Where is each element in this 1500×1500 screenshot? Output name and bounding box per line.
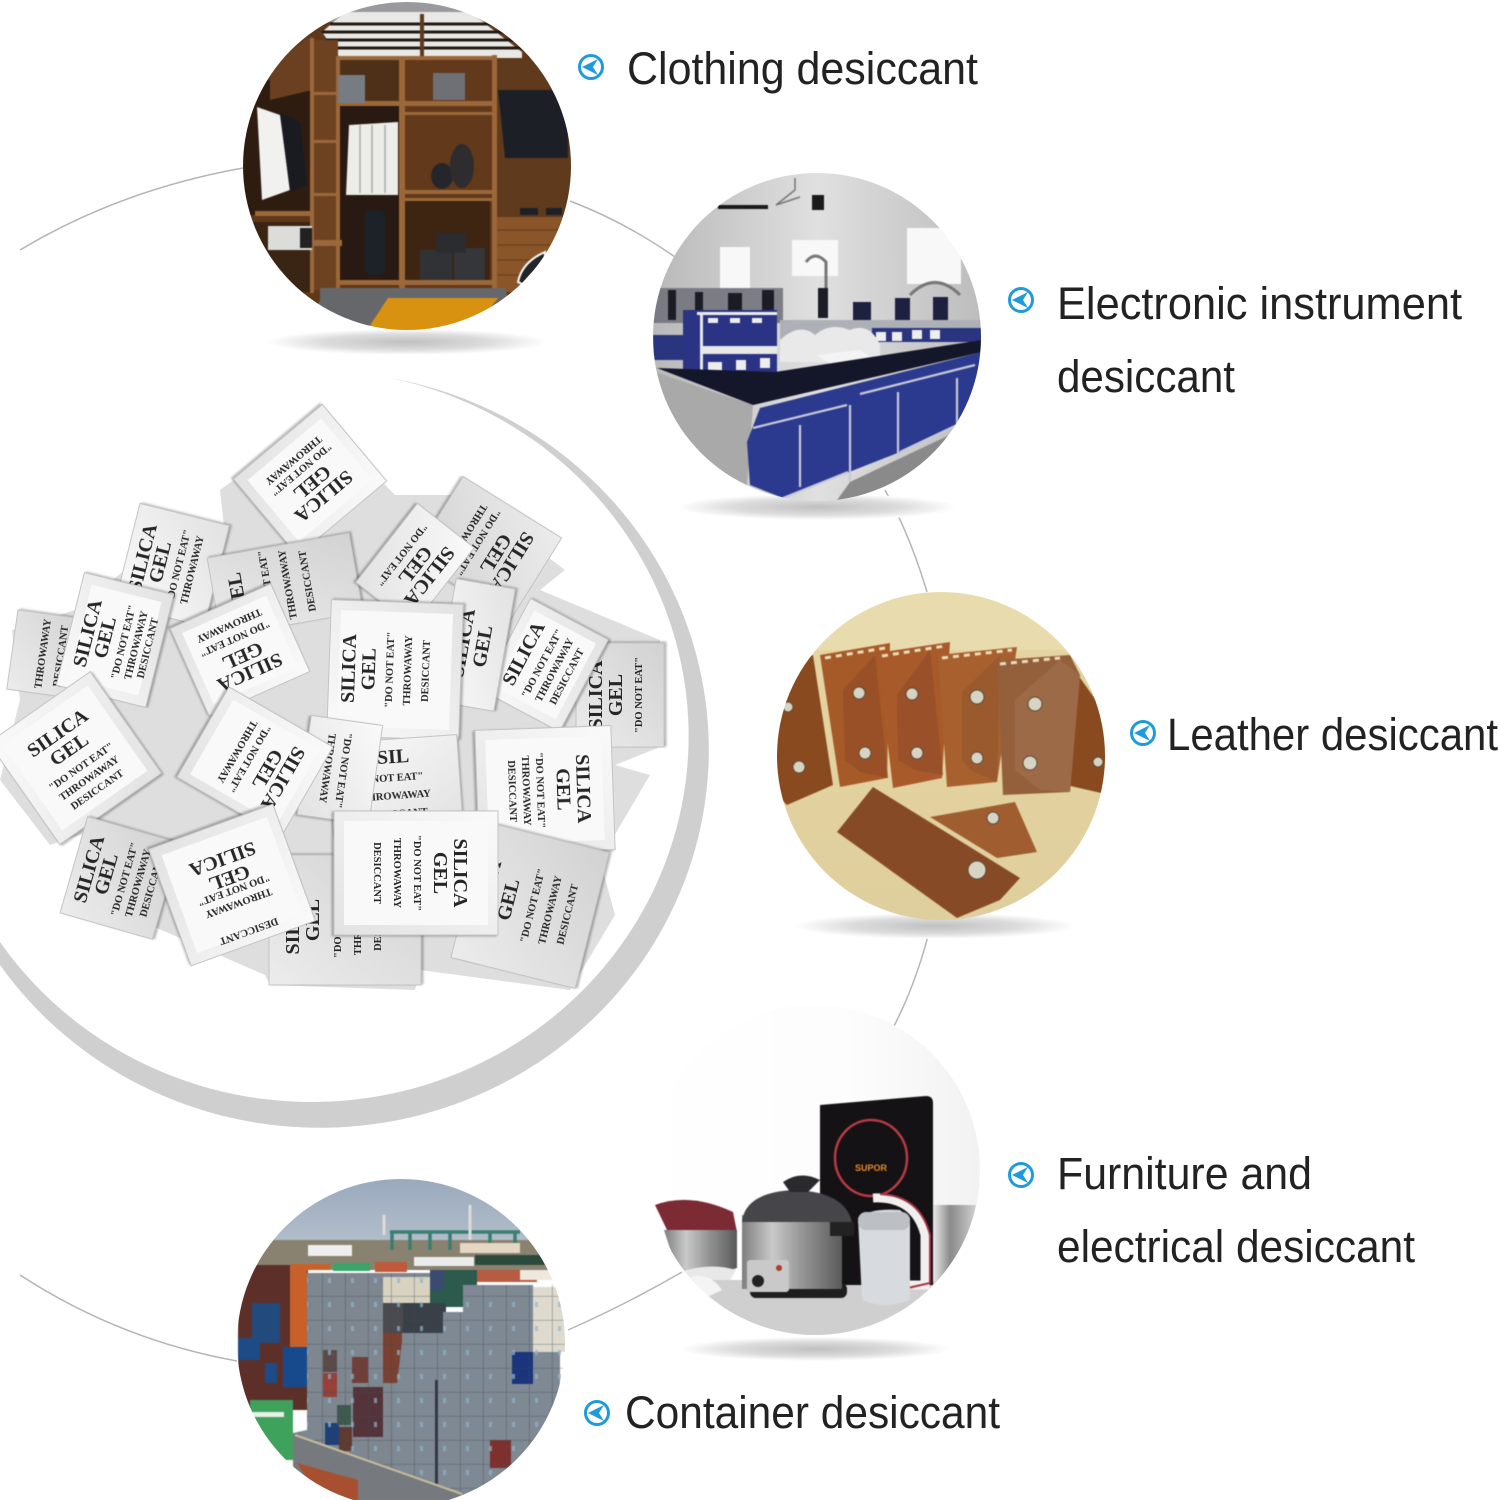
container grid overlay [293,1273,567,1500]
pressure cooker [750,1283,847,1298]
centre left hanging bay [340,106,400,280]
packet: THROWAWAY [537,874,565,946]
packet: THROWAWAY [442,502,489,568]
packet: SILICA [498,618,550,689]
packet: DESICCANT [371,842,382,904]
packet [297,715,383,825]
packet: GEL [302,899,324,941]
photo: home appliances: SUPOR [855,1163,887,1173]
connector lines between the photo circles [20,168,932,1361]
packet: "DO NOT EAT" [533,752,546,828]
packet: SILICA [69,832,109,905]
packet: THROWAWAY [179,534,207,606]
label: electronic instrument [1010,278,1462,402]
shelves and uprights [255,38,497,295]
shadow under leather photo [795,913,1075,939]
stitching [825,646,1060,664]
dark monitors [852,296,949,321]
induction cooker [820,1096,933,1285]
packet: SILICA [399,542,459,610]
truck trailer [297,1463,358,1500]
packet: DESICCANT [138,856,166,918]
packet: SILICA [69,597,107,669]
packet: "DO NOT EAT" [47,741,116,794]
packet: GEL [46,729,93,771]
pouch 4 [997,655,1080,795]
cabinets [747,352,982,498]
label: container: Container desiccant [625,1387,1000,1438]
counter top [657,340,982,405]
packet: "DO NOT EAT" [634,657,645,733]
plants and glassware [806,256,960,300]
packet [115,503,229,627]
packet [60,817,180,939]
label: furniture and electrical: Furniture and [1057,1148,1312,1199]
ceiling slats [322,12,522,58]
left bench [653,335,683,360]
label: electronic instrument: Electronic instrument [1057,278,1462,329]
packet: GEL [468,624,497,669]
packet: "DO NOT EAT" [257,549,281,626]
shadow under appliance photo [680,1337,950,1361]
packet: GEL [551,768,575,811]
packet [334,811,498,935]
packet: "DO NOT EAT" [225,723,272,794]
lying pouch, front [837,787,1020,918]
packet: SILICA [449,839,471,908]
packet [0,672,161,844]
rice cooker [655,1200,737,1232]
packet: "DO NOT EAT" [268,440,333,498]
packet: "DO NOT EAT" [373,521,429,588]
packet: GEL [493,877,524,923]
packet: THROWAWAY [214,718,259,785]
packet [327,600,463,740]
label: furniture and electrical [1010,1148,1415,1272]
black storage boxes [420,250,452,280]
grey crescent ring around the product [0,378,709,1128]
packet [149,804,315,966]
packet [269,855,421,985]
packet: GEL [90,851,123,897]
packet: GEL [475,530,516,577]
packet: SILICA [124,521,162,594]
quay [293,1433,463,1500]
floor [836,435,948,500]
packet: "NOT EAT" [365,771,424,786]
grey boxes [338,75,365,103]
lying pouch, back [930,802,1037,858]
packet [170,584,310,716]
packet: GEL [219,637,266,674]
packet: THROWAWAY [33,618,54,689]
packet: DESICCANT [556,883,581,946]
packet [482,598,608,732]
packet: GEL [247,745,287,793]
packet: "DO NOT EAT" [411,835,422,911]
packet: SILICA [446,607,480,679]
label: furniture and electrical: electrical desiccant [1057,1221,1415,1272]
far left bay [243,80,312,215]
floor [692,1280,936,1335]
pouch far left [772,655,833,805]
packet [7,610,97,700]
photo: home appliances [650,1005,980,1340]
packet [327,735,463,835]
packet: SILICA [213,648,286,696]
packet: THROWAWAY [391,838,402,909]
floor and rug [318,288,508,326]
pouch 2 [887,642,951,788]
photo: wardrobe [240,0,575,340]
packet: GEL [605,674,627,716]
packet: DESICCANT [548,647,587,707]
green containers [250,1400,293,1460]
sinks and white fittings [780,327,880,362]
label: electronic instrument: desiccant [1057,351,1235,402]
packet [576,643,664,747]
packet: THROWAWAY [58,754,122,804]
photo: container port [235,1178,570,1500]
packet: "DO NOT EAT" [384,632,397,708]
packet: "DO NOT EAT" [332,732,353,809]
packet: THROWAWAY [262,433,323,487]
packet: SILICA [256,743,309,814]
shadow under wardrobe photo [267,329,547,355]
packet [177,687,333,837]
packet: GEL [429,852,451,894]
packet: SILICA [337,633,361,703]
chair [518,252,545,285]
icon: blue circle arrow [580,56,602,78]
glass kettle [933,1205,976,1282]
packet: THROWAWAY [519,755,532,826]
packet [451,822,609,988]
pouch far right [1070,678,1105,794]
rivets [783,687,1103,879]
icon: blue circle arrow [1010,1164,1032,1186]
packet: SILICA [186,837,259,881]
packet: "DO NOT EAT" [165,529,194,605]
packet: SILICA [23,704,93,762]
packet: GEL [206,860,253,895]
left stack [238,1265,308,1410]
grey stepped stack, right [395,1285,560,1500]
right bay [497,60,572,220]
packet [435,579,515,711]
packet [233,404,387,556]
packet: GEL [393,542,437,588]
packet: GEL [145,539,176,585]
packet: SILICA [571,754,595,824]
left narrow column [312,40,338,290]
packet: THROWAWAY [316,733,337,804]
packet: DESICCANT [136,617,161,680]
shoes [520,208,538,215]
packet: THROWAWAY [353,884,364,955]
packet: DESICCANT [366,807,428,822]
product photo: pile of silica gel packets [0,404,665,990]
packet: THROWAWAY [123,610,151,681]
packet [475,726,615,854]
pile underlay [0,418,665,990]
packet: SILICA [585,660,607,729]
white kettle handle [873,1198,925,1285]
packet: DESICCANT [218,915,280,946]
packet: "DO NOT EAT" [198,617,271,658]
packet: DESICCANT [373,889,384,951]
upper shelf unit [683,310,777,376]
packet: THROWAWAY [203,885,273,920]
label: clothing: Clothing desiccant [627,43,978,94]
packet: THROWAWAY [194,606,263,644]
grey stack [293,1273,440,1500]
port and cranes [235,1240,570,1270]
packet: DESICCANT [297,550,319,612]
packet [356,503,474,627]
icon: blue circle arrow [586,1402,608,1424]
packet: THROWAWAY [402,635,415,706]
packet: GEL [223,571,252,616]
pouch 3 [938,647,1017,787]
packet: SILICA [483,528,538,598]
packet: "DO NOT EAT" [196,871,271,907]
packet: GEL [90,614,121,661]
packet: "DO NOT EAT" [519,868,548,944]
packet [56,573,174,707]
windows [720,228,961,289]
hanging clothes [257,107,290,200]
icon: blue circle arrow [1132,722,1154,744]
packet: "DO NOT EAT" [333,882,344,958]
white kettle [858,1210,910,1305]
far stacks [333,1263,370,1271]
pouch 1 [820,643,890,787]
packet: SIL [376,745,410,769]
packet: DESICCANT [69,768,126,813]
packet: THROWAWAY [360,789,432,804]
packet: "DO NOT EAT" [110,841,141,918]
packet: THROWAWAY [534,636,577,704]
packet [412,477,562,619]
centre right shelves [400,60,493,290]
icon: blue circle arrow [1010,288,1032,312]
packet: DESICCANT [52,625,71,688]
photo: leather pouches [772,590,1110,925]
packet: "DO NOT EAT" [452,507,502,577]
packet: DESICCANT [505,760,518,822]
packet: SILICA [282,885,304,954]
left grey panel [650,372,753,485]
packet: THROWAWAY [277,548,300,620]
packet: THROWAWAY [124,848,154,919]
packet: "DO NOT EAT" [520,628,565,700]
packet: GEL [289,460,335,504]
packet: DESICCANT [420,640,433,702]
packet: SILICA [468,858,506,930]
shadow under laboratory photo [677,494,957,520]
packet: SILICA [290,466,357,527]
packet [207,533,363,637]
packet: "DO NOT EAT" [110,604,139,681]
packet: GEL [357,648,381,691]
ceiling fittings [718,205,768,209]
vases [431,163,453,189]
photo: laboratory [650,170,990,510]
